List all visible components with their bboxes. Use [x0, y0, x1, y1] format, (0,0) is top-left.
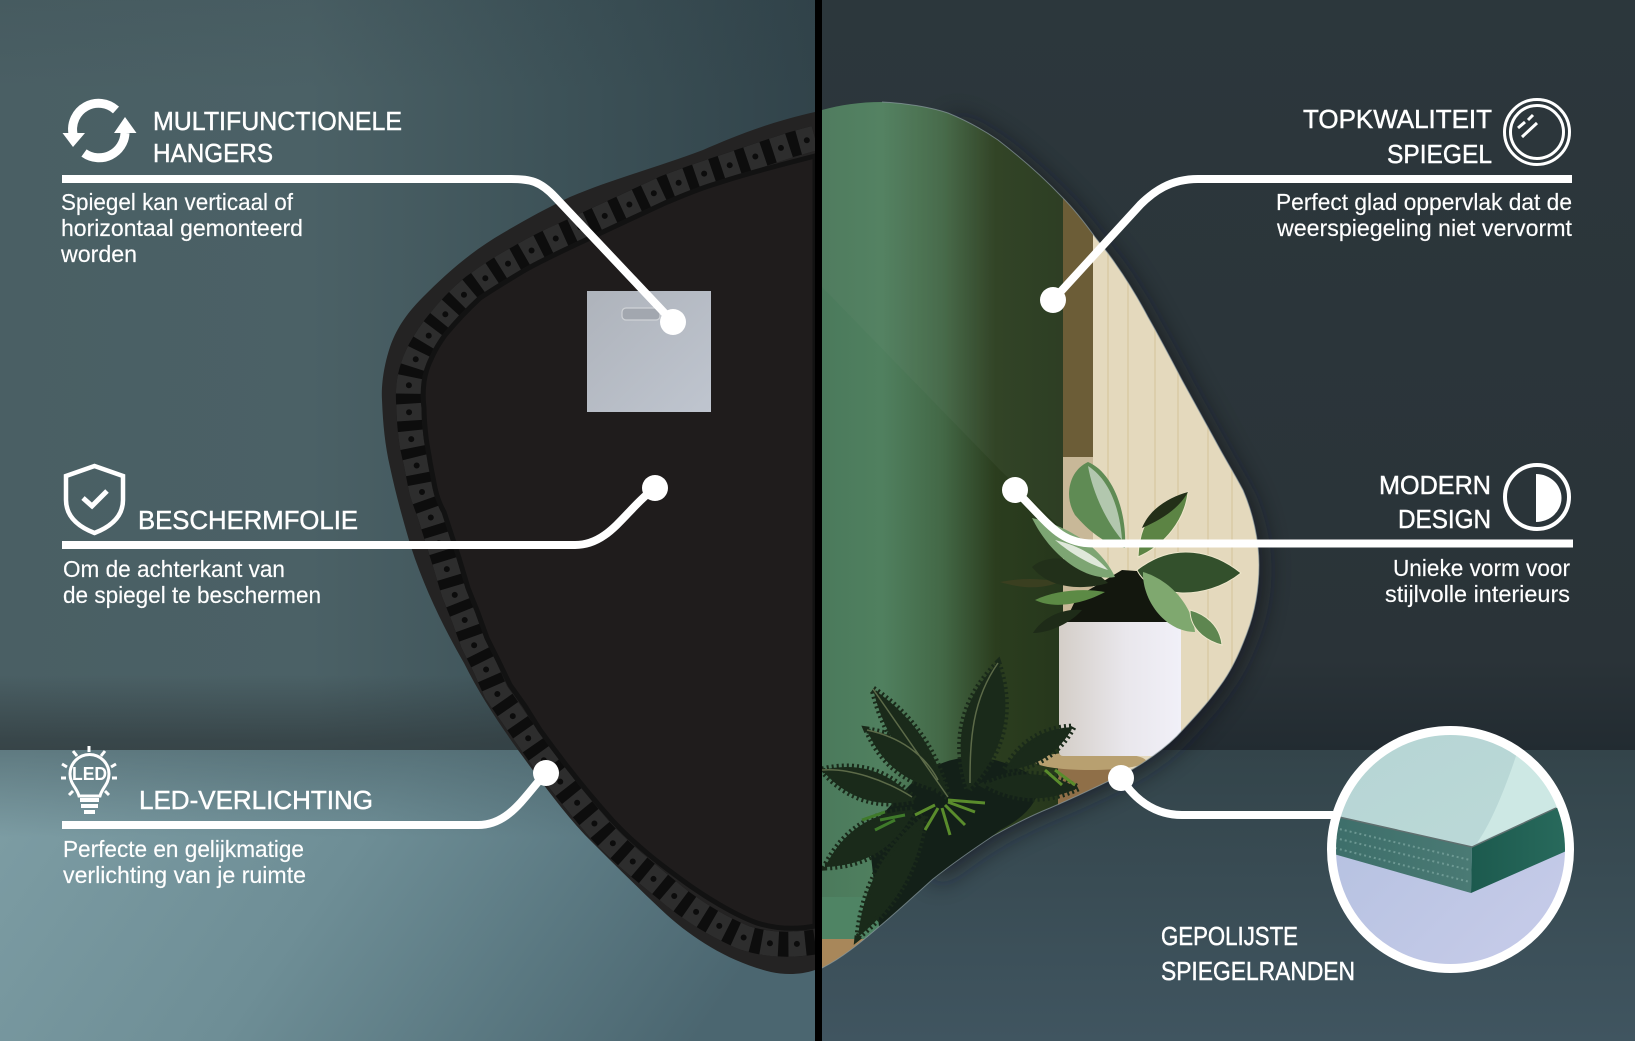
- mirror back side with mounting rim: [382, 112, 815, 974]
- white pot: [1059, 620, 1181, 756]
- description: horizontaal gemonteerd: [61, 215, 303, 241]
- heading: [1303, 104, 1492, 169]
- panel: gepolijste spiegelranden: [1108, 715, 1580, 986]
- icon: round mirror: [1504, 100, 1570, 164]
- panel: led-verlichting: [61, 746, 559, 888]
- mounting hanger plate: [587, 291, 711, 412]
- description: Unieke vorm voor: [1393, 555, 1570, 581]
- panel: beschermfolie: [62, 466, 668, 608]
- heading: GEPOLIJSTE: [1161, 921, 1298, 951]
- heading: LED-VERLICHTING: [139, 785, 373, 815]
- description: Perfecte en gelijkmatige: [63, 836, 304, 862]
- callout line and dot: [1108, 765, 1335, 815]
- heading: TOPKWALITEIT: [1303, 104, 1492, 134]
- description: stijlvolle interieurs: [1385, 581, 1570, 607]
- description: [60, 189, 303, 267]
- callout line and dot: [62, 179, 686, 335]
- wood panel: [1063, 190, 1273, 800]
- panel: topkwaliteit spiegel: [1040, 100, 1573, 313]
- heading: BESCHERMFOLIE: [138, 505, 358, 535]
- heading: [1379, 470, 1491, 534]
- center divider: [815, 0, 822, 1041]
- description: worden: [60, 241, 137, 267]
- description: weerspiegeling niet vervormt: [1276, 215, 1573, 241]
- description: [63, 556, 321, 608]
- heading: SPIEGELRANDEN: [1161, 956, 1355, 986]
- callout line and dot: [62, 760, 559, 825]
- description: [63, 836, 306, 888]
- description: [1385, 555, 1570, 607]
- mirror shadow: [904, 117, 1263, 883]
- mirror front with reflected room: [822, 95, 1273, 979]
- floor and baseboard: [822, 897, 864, 968]
- mirror edge: [822, 102, 1259, 968]
- callout line and dot: [1040, 179, 1572, 313]
- rim outer shell: [382, 112, 815, 974]
- polished edge detail circle: [1327, 715, 1580, 973]
- panel: multifunctionele hangers: [60, 103, 686, 335]
- background: right wall and floor: [818, 0, 1635, 1041]
- rim teeth: [408, 138, 815, 944]
- icon: led light bulb: [61, 746, 117, 812]
- description: Perfect glad oppervlak dat de: [1276, 189, 1572, 215]
- background: left wall and floor: [0, 0, 818, 1041]
- plant stand: [1035, 754, 1146, 804]
- panel: modern design: [1002, 465, 1573, 607]
- icon: half circle: [1505, 465, 1569, 529]
- heading: [1161, 921, 1355, 986]
- callout line and dot: [1002, 477, 1573, 544]
- heading: HANGERS: [153, 138, 273, 168]
- icon: rotating arrows: [62, 103, 136, 158]
- callout line and dot: [62, 475, 668, 545]
- leafy plant: [1000, 462, 1241, 645]
- fern plant: [822, 663, 1078, 937]
- inner back panel: [423, 156, 815, 928]
- heading: DESIGN: [1398, 504, 1491, 534]
- green wall: [822, 102, 1063, 897]
- description: [1276, 189, 1573, 241]
- heading: MULTIFUNCTIONELE: [153, 106, 402, 136]
- icon: led light bulb: LED: [72, 764, 107, 784]
- description: Spiegel kan verticaal of: [61, 189, 294, 215]
- description: verlichting van je ruimte: [63, 862, 306, 888]
- heading: [153, 106, 402, 168]
- description: Om de achterkant van: [63, 556, 285, 582]
- heading: MODERN: [1379, 470, 1491, 500]
- heading: SPIEGEL: [1387, 139, 1492, 169]
- icon: shield with check: [66, 466, 123, 533]
- description: de spiegel te beschermen: [63, 582, 321, 608]
